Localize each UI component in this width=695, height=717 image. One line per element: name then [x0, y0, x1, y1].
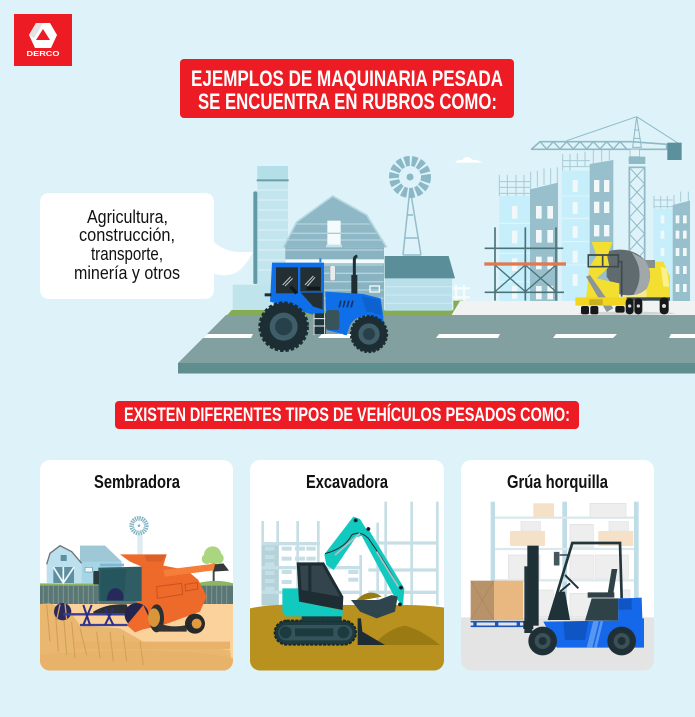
title banner	[180, 59, 514, 118]
panel: Excavadora	[250, 460, 445, 672]
windmill	[394, 161, 426, 255]
illustration: excavator on site	[250, 502, 445, 672]
panel: Sembradora	[40, 460, 233, 672]
speech bubble: minería y otros	[74, 263, 180, 283]
panel: Grúa horquilla	[461, 460, 654, 671]
speech bubble: transporte,	[91, 244, 163, 264]
scaffold	[484, 227, 566, 301]
title banner: EJEMPLOS DE MAQUINARIA PESADA	[191, 66, 503, 91]
heading: Grúa horquilla: Grúa horquilla	[507, 472, 609, 492]
heading: Excavadora: Excavadora	[306, 472, 389, 492]
logo: Derco: DERCO	[26, 49, 60, 58]
illustration: forklift in warehouse	[461, 502, 654, 671]
tractor	[260, 256, 387, 352]
section heading banner	[115, 401, 579, 429]
speech bubble: Agricultura,	[87, 207, 168, 227]
speech bubble: construcción,	[79, 225, 175, 245]
heading: Sembradora: Sembradora	[94, 472, 181, 492]
speech bubble	[40, 193, 253, 299]
title banner: SE ENCUENTRA EN RUBROS COMO:	[198, 89, 497, 114]
concrete mixer truck	[575, 242, 675, 315]
farm buildings	[227, 166, 470, 316]
tower crane	[532, 117, 682, 304]
illustration: harvester on farm	[40, 518, 233, 672]
section heading banner: EXISTEN DIFERENTES TIPOS DE VEHÍCULOS PESADOS COMO:	[124, 404, 570, 426]
panel: city and farm road scene	[178, 117, 695, 374]
road	[178, 301, 695, 374]
construction skyline	[455, 149, 690, 301]
logo: Derco	[14, 14, 72, 66]
